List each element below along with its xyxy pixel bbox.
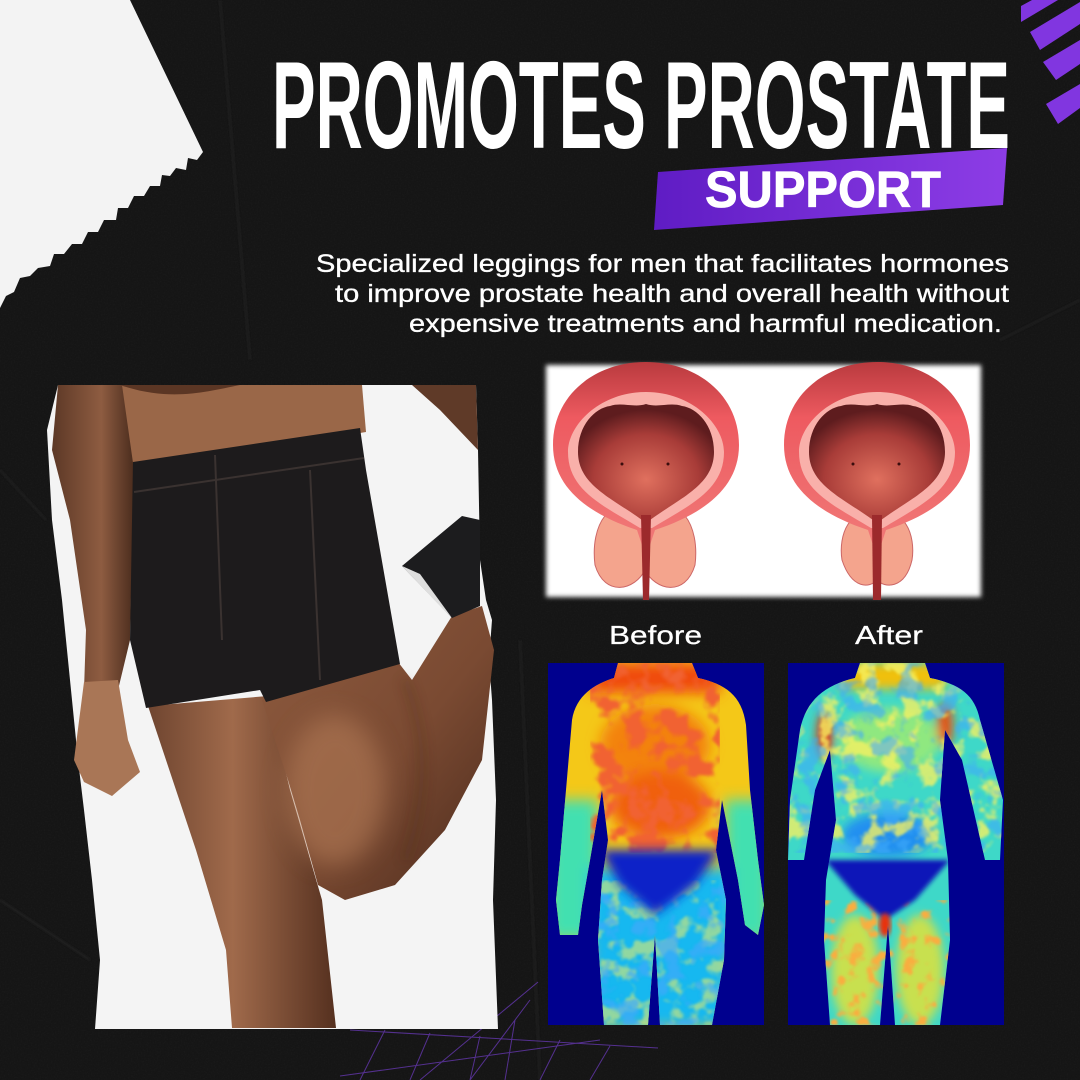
shorts <box>130 428 400 708</box>
description text: Specialized leggings for men that facilitates hormones <box>316 250 1009 278</box>
label: before: Before <box>609 620 702 650</box>
thermal image: after <box>788 663 1004 1025</box>
torn paper corner <box>0 0 203 308</box>
chest shadow <box>120 385 240 394</box>
description text <box>316 250 1009 338</box>
thermal image: before <box>548 663 770 1028</box>
purple corner stripes <box>1021 0 1080 124</box>
label: after: After <box>855 620 923 650</box>
description text: expensive treatments and harmful medication. <box>409 310 1002 338</box>
before prostate <box>553 362 739 600</box>
raised leg <box>262 606 494 900</box>
calf crease <box>405 680 422 860</box>
panel: product photo <box>47 385 498 1029</box>
shorts seams <box>134 455 364 680</box>
torn white photo background <box>47 385 498 1029</box>
standing leg <box>148 696 336 1028</box>
subtitle banner: SUPPORT <box>705 161 941 218</box>
after prostate <box>784 362 970 600</box>
shoe <box>402 516 480 618</box>
subtitle banner <box>654 148 1007 230</box>
far arm <box>412 385 478 450</box>
near arm <box>52 385 134 690</box>
torso <box>110 385 366 470</box>
hand <box>74 680 140 796</box>
blurred white backdrop <box>546 365 981 597</box>
purple grid decoration <box>340 982 658 1080</box>
description text: to improve prostate health and overall health without <box>335 280 1009 308</box>
knee highlight <box>285 715 385 865</box>
panel: prostate illustration <box>546 362 981 600</box>
